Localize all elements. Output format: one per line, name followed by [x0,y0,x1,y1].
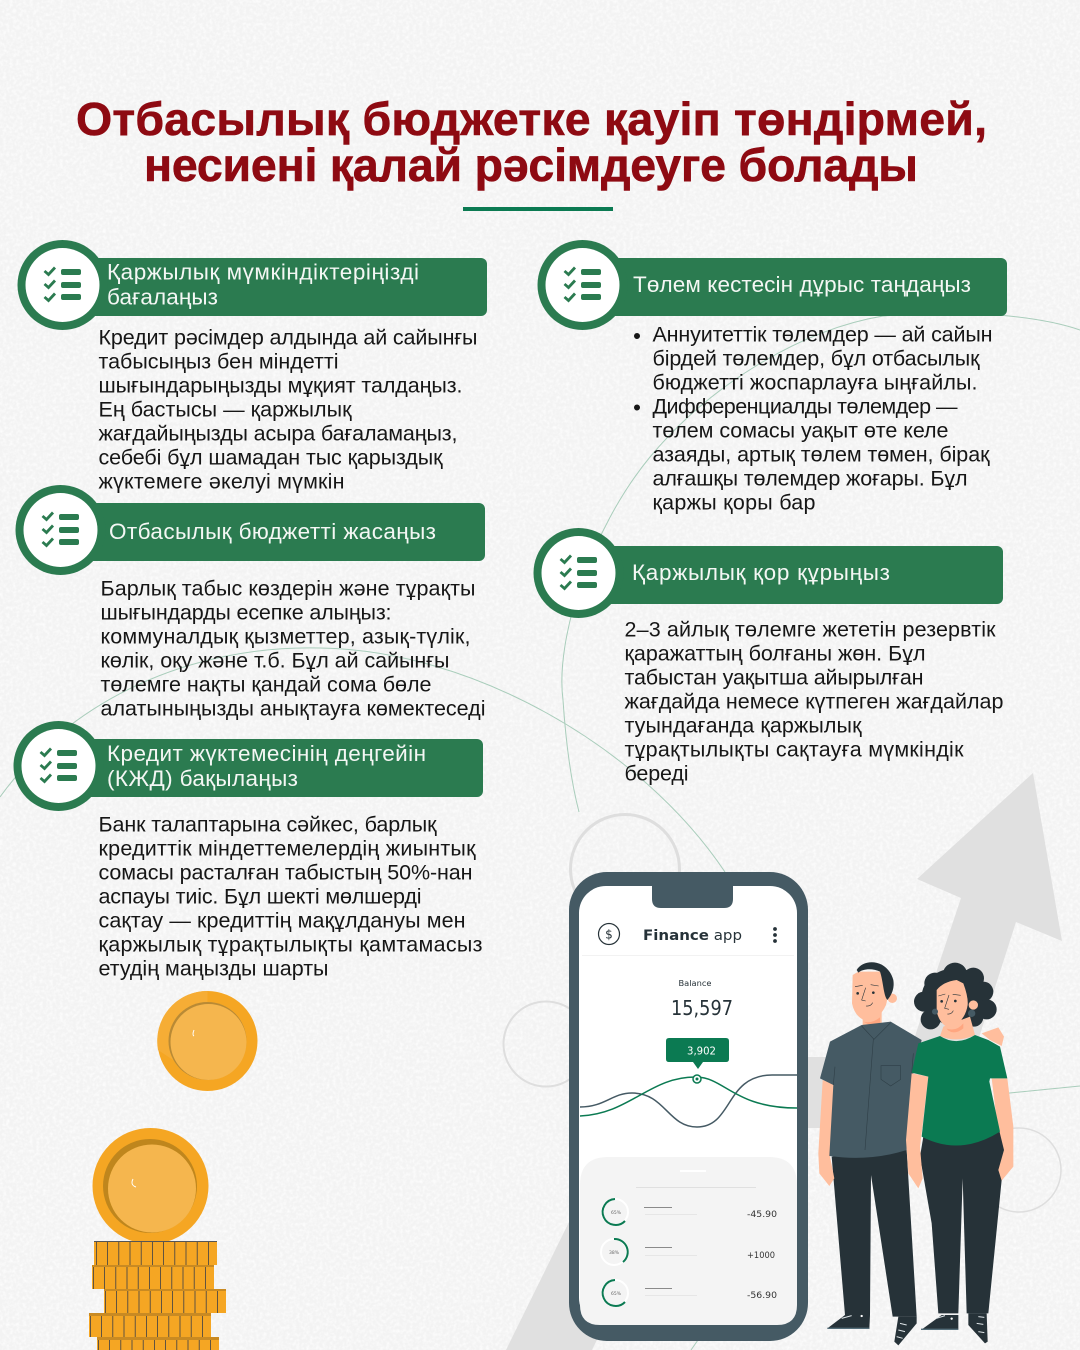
section 5 header: Қаржылық қор құрыңыз [632,560,890,585]
section 3 text: кредиттік міндеттемелердің жиынтық [98,836,476,860]
section 2 header: Отбасылық бюджетті жасаңыз [109,519,436,544]
section 3 header: Кредит жүктемесінің деңгейін [107,741,426,766]
title: несиені қалай рәсімдеуге болады [144,139,918,191]
section 1 text: жүктемеге әкелуі мүмкін [98,470,344,494]
section 3 header [14,721,483,811]
tooltip [666,1038,729,1069]
phone mockup [569,872,808,1341]
section 1 text: шығындарыңызды мұқият талдаңыз. [98,374,462,398]
section 5 text: тұрақтылықты сақтауға мүмкіндік [624,738,964,762]
section 2 text: Барлық табыс көздерін және тұрақты [100,576,476,600]
section 4 bullet list: бірдей төлемдер, бұл отбасылық [652,346,980,370]
section 1 header: бағалаңыз [107,284,218,310]
section 2 text: шығындарды есепке алыңыз: [100,600,392,624]
man [818,962,922,1345]
transaction rows: 65% [611,1210,622,1216]
section 1 header: Қаржылық мүмкіндіктеріңізді [107,260,419,284]
section 3 text: аспауы тиіс. Бұл шекті мөлшерді [98,884,422,908]
woman [906,963,1013,1343]
illustration: couple [818,962,1013,1345]
section 3 text: етудің маңызды шарты [98,956,328,980]
section 1 header [18,240,487,330]
section 1 text: табысыңыз бен міндетті [98,350,338,374]
title [76,93,987,191]
balance [671,979,733,1020]
tooltip: 3,902 [687,1046,716,1058]
balance: 15,597 [671,996,733,1020]
section 3 text: сомасы расталған табыстың 50%-нан [98,860,472,884]
section 5 text [624,618,1004,786]
section 4 bullet list: алғашқы төлемдер жоғары. Бұл [652,466,968,490]
section 3 text: сақтау — кредиттің мақұлдануы мен [98,908,466,932]
bottom sheet [580,1157,797,1325]
section 5 text: табыстан уақытша айырылған [624,666,924,690]
section 4 bullet list: бюджетті жоспарлауға ыңғайлы. [652,370,978,394]
section 4 bullet list: азаяды, артық төлем төмен, бірақ [652,442,990,466]
transaction rows [601,1199,777,1306]
background arcs and rings [0,313,1080,1350]
transaction rows: -45.90 [747,1210,777,1220]
icon: coin stack [89,1128,226,1350]
section 1 text: себебі бұл шамадан тыс қарыздық [98,446,443,470]
balance: Balance [678,979,712,988]
section 1 text: жағдайыңызды асыра бағаламаңыз, [98,422,458,446]
section 5 text: туындағанда қаржылық [624,714,862,738]
section 2 text: коммуналдық қызметтер, азық-түлік, [100,624,470,648]
section 3 text: Банк талаптарына сәйкес, барлық [98,812,437,836]
section 4 bullet list [634,322,992,514]
section 5 text: 2–3 айлық төлемге жететін резервтік [624,618,996,642]
menu dots [773,927,777,943]
transaction rows: +1000 [747,1251,775,1261]
section 2 header [16,485,485,575]
section 2 text [100,576,486,720]
section 5 text: қаражаттың болғаны жөн. Бұл [624,642,926,666]
icon: dollar [598,924,620,944]
section 4 header: Төлем кестесін дұрыс таңдаңыз [633,272,971,297]
section 2 text: алатыныңызды анықтауға көмектеседі [100,696,486,720]
title underline [463,207,613,211]
icon: dollar: $ [605,928,613,942]
section 1 text: Кредит рәсімдер алдында ай сайынғы [98,326,478,350]
app title: Finance app [643,928,742,944]
title: Отбасылық бюджетке қауіп төндірмей, [76,93,987,145]
section 5 header [534,528,1003,618]
section 1 text: Ең бастысы — қаржылық [98,398,352,422]
section 4 header [538,240,1007,330]
section 1 text [98,326,478,494]
transaction rows: 65% [611,1291,622,1297]
icon: single gold coin [157,991,258,1091]
transaction rows: 38% [609,1250,620,1256]
section 4 bullet list: төлем сомасы уақыт өте келе [652,418,948,442]
line chart [580,1075,797,1127]
section 3 text: қаржылық тұрақтылықты қамтамасыз [98,932,483,956]
background arrow [506,773,1062,1350]
section 5 text: жағдайда немесе күтпеген жағдайлар [624,690,1004,714]
section 2 text: көлік, оқу және т.б. Бұл ай сайынғы [100,648,450,672]
transaction rows: -56.90 [747,1291,777,1301]
section 3 text [98,812,483,980]
section 4 bullet list: Дифференциалды төлемдер — [652,394,958,418]
section 5 text: береді [624,762,688,786]
section 3 header: (КЖД) бақылаңыз [107,766,298,791]
section 4 bullet list: қаржы қоры бар [652,490,816,514]
section 2 text: төлемге нақты қандай сома бөле [100,672,432,696]
section 4 bullet list: Аннуитеттік төлемдер — ай сайын [652,322,992,346]
